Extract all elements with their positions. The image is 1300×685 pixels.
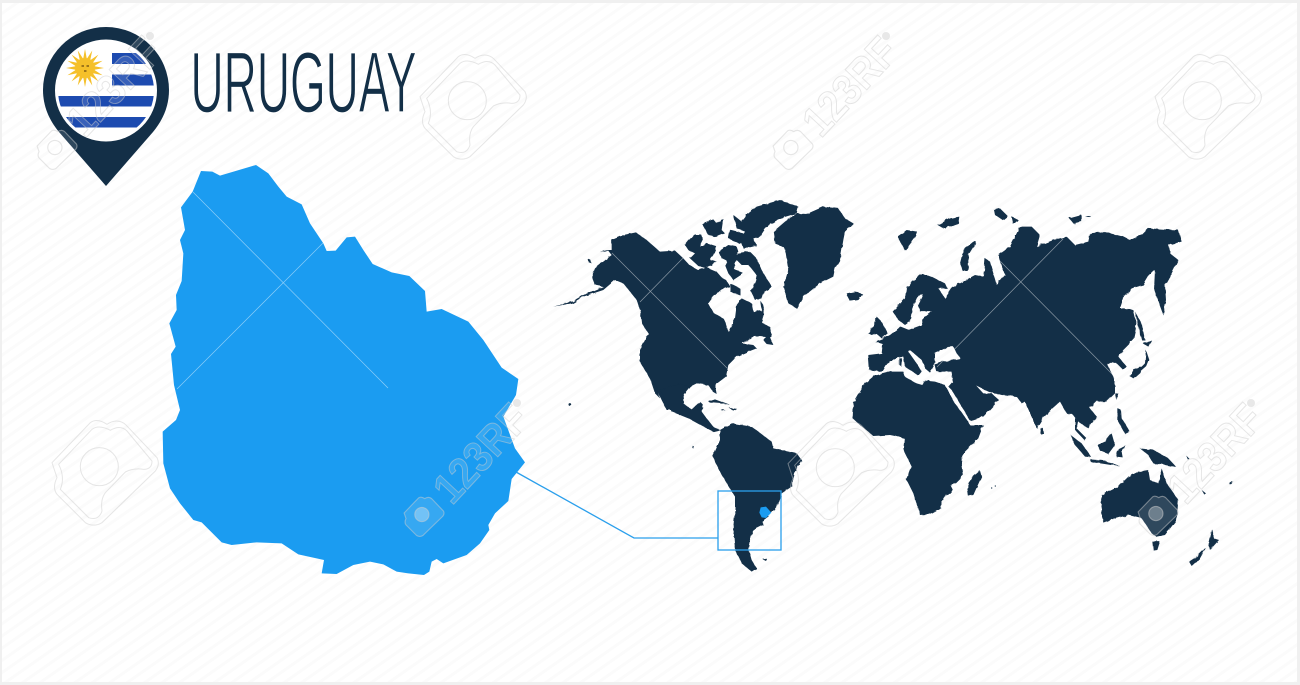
Oceania and Southeast Asia	[1071, 408, 1233, 566]
watermarks: 123RF	[1158, 395, 1272, 512]
watermarks	[37, 28, 1272, 536]
map: world	[553, 200, 1233, 572]
Central America and Caribbean	[660, 383, 737, 432]
watermarks: 123RF	[57, 28, 171, 145]
watermarks: 123RF	[424, 395, 538, 512]
North America and Arctic	[553, 200, 863, 410]
icon: map pin with flag	[43, 27, 169, 186]
map: Uruguay large	[163, 165, 525, 575]
title: URUGUAY	[190, 35, 417, 131]
South America and Falklands	[692, 423, 802, 572]
Africa, Madagascar, Sri Lanka	[853, 372, 1044, 515]
Eurasia and Arctic islands	[847, 208, 1182, 428]
watermark lines over world map	[612, 239, 1115, 377]
callout: connector and locator box	[516, 472, 781, 550]
watermarks: 123RF	[793, 28, 907, 145]
icon: Uruguay highlighted on world map	[759, 507, 771, 518]
